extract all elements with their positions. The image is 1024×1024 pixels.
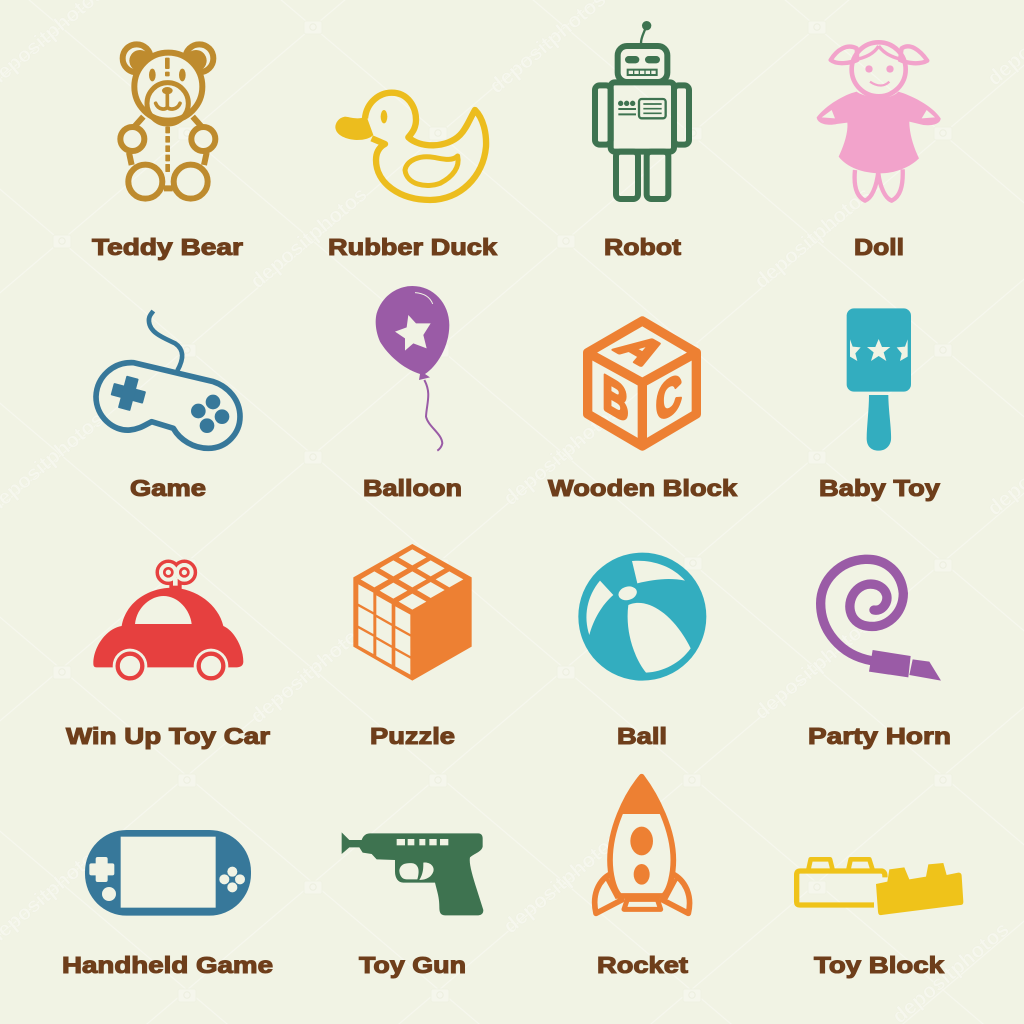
label: Baby Toy: Baby Toy xyxy=(819,475,940,501)
icon: party horn xyxy=(821,559,941,681)
icon: rattle xyxy=(847,308,911,451)
watermark: depositphotos xyxy=(246,183,372,293)
icon: ABC block: C xyxy=(656,362,682,434)
label: Rubber Duck: Rubber Duck xyxy=(328,234,497,260)
label: Win Up Toy Car: Win Up Toy Car xyxy=(66,723,270,749)
panel: handheld game xyxy=(62,830,273,978)
label: Game: Game xyxy=(130,475,206,501)
watermark: depositphotos xyxy=(750,614,876,724)
icon: ABC block: A xyxy=(604,328,678,371)
panel: puzzle xyxy=(353,544,472,749)
label: Teddy Bear: Teddy Bear xyxy=(92,234,243,260)
panel: wooden block xyxy=(548,321,737,501)
label: Puzzle: Puzzle xyxy=(370,723,455,749)
panel: teddy bear xyxy=(92,44,243,260)
panel: rocket xyxy=(595,777,690,978)
label: Robot: Robot xyxy=(604,234,681,260)
label: Party Horn: Party Horn xyxy=(808,723,951,749)
panel: game xyxy=(96,311,240,501)
watermark: depositphotos xyxy=(246,618,372,728)
icon: doll xyxy=(817,42,941,201)
panel: ball xyxy=(578,553,706,749)
icon: rocket xyxy=(595,777,690,913)
watermark: depositphotos xyxy=(750,183,876,293)
panel: rubber duck xyxy=(328,93,497,260)
icon: handheld console xyxy=(85,830,251,916)
panel: party horn xyxy=(808,559,951,749)
icon: rubber duck xyxy=(335,93,486,200)
icon: teddy bear xyxy=(120,44,215,199)
icon: toy bricks xyxy=(797,859,963,915)
label: Toy Block: Toy Block xyxy=(814,952,944,978)
icon: ABC block xyxy=(588,321,696,446)
panel: doll xyxy=(817,42,941,260)
icon: toy gun xyxy=(342,832,483,915)
icon: robot xyxy=(595,21,689,199)
icon: ABC block: B xyxy=(603,363,628,434)
label: Handheld Game: Handheld Game xyxy=(62,952,273,978)
icon: puzzle cube xyxy=(353,544,472,681)
panel: toy gun xyxy=(342,832,483,978)
icon: game controller xyxy=(96,311,240,448)
panel: baby toy xyxy=(819,308,940,501)
label: Ball: Ball xyxy=(617,723,667,749)
panel: robot xyxy=(595,21,689,260)
label: Rocket: Rocket xyxy=(597,952,688,978)
label: Wooden Block: Wooden Block xyxy=(548,475,737,501)
panel: balloon xyxy=(363,286,462,501)
label: Doll: Doll xyxy=(854,234,904,260)
label: Toy Gun: Toy Gun xyxy=(359,952,466,978)
label: Balloon: Balloon xyxy=(363,475,462,501)
watermark: depositphotos xyxy=(499,828,625,938)
icon: balloon xyxy=(376,286,449,451)
icon: beach ball xyxy=(578,553,706,681)
panel: wind up toy car xyxy=(66,561,270,749)
watermark: depositphotos xyxy=(499,400,625,510)
panel: toy block xyxy=(797,859,963,978)
icon: toy car xyxy=(93,561,243,683)
